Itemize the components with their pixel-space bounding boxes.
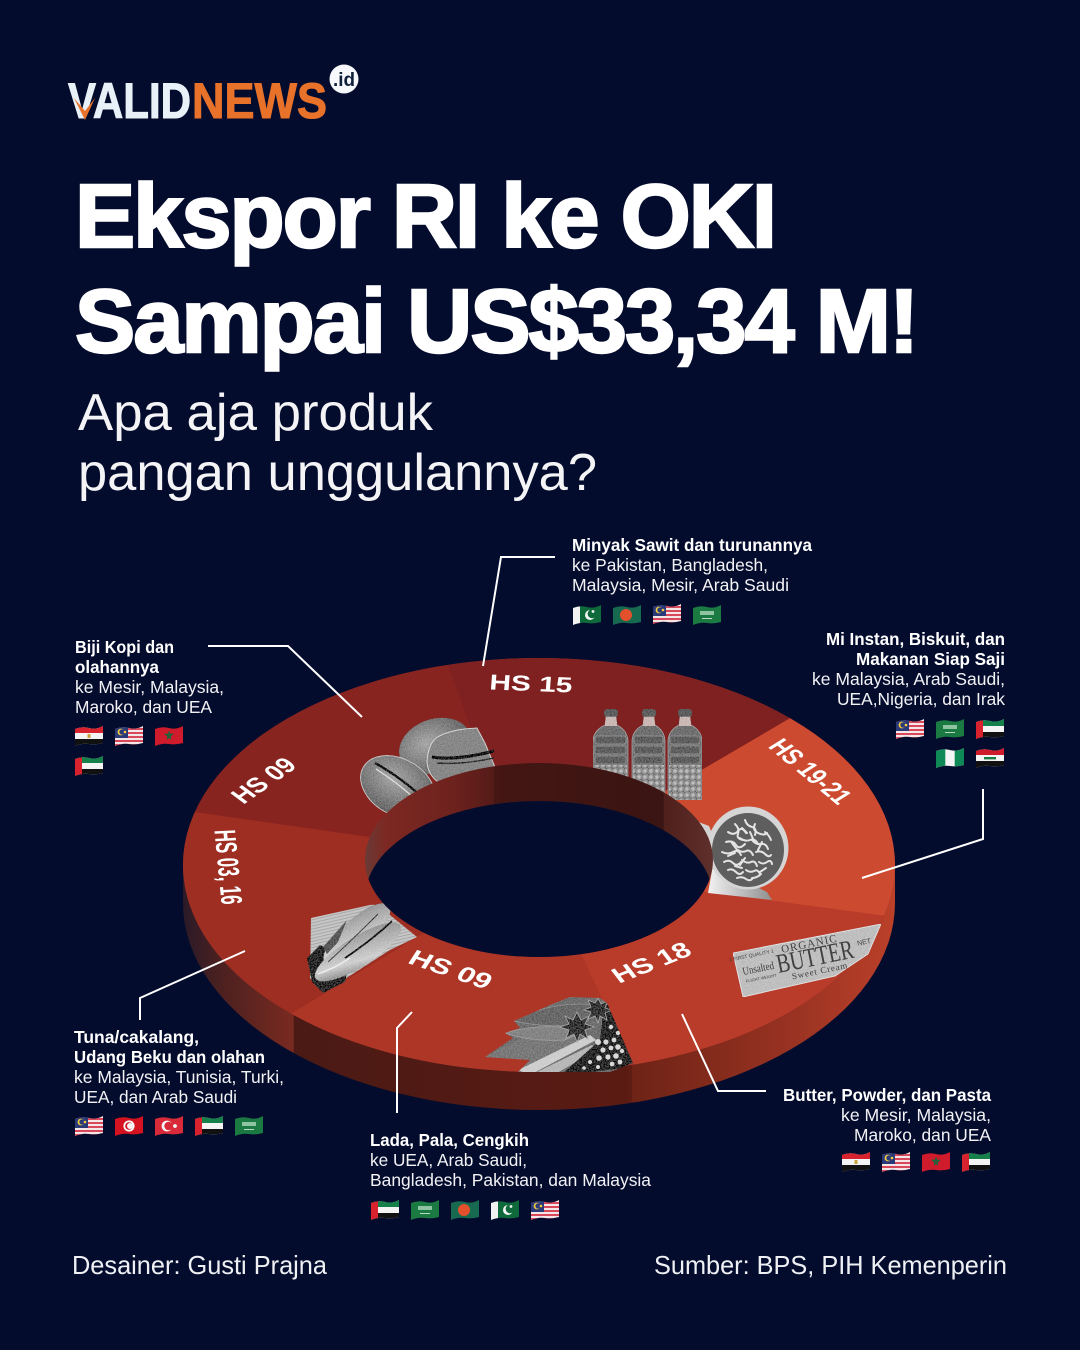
donut inner wall <box>365 763 713 957</box>
label: HS 03, 16: HS 03, 16 <box>208 829 249 905</box>
flags: Biji Kopi destinations <box>75 726 183 776</box>
callout: Minyak Sawit: ke Pakistan, Bangladesh, <box>572 555 768 575</box>
donut hole <box>368 801 710 957</box>
icon: butter stick: 1 FIRST QUALITY 1 <box>729 949 775 963</box>
callout: Lada <box>370 1130 651 1220</box>
segment: HS 15 <box>448 658 790 791</box>
callout: Tuna: UEA, dan Arab Saudi <box>74 1087 237 1107</box>
icon: butter stick: ORGANIC <box>780 933 839 956</box>
flags: Mi Instan destinations <box>896 719 1004 768</box>
logo: ValidNews.id: VALID <box>68 73 191 129</box>
callout: Lada: ke UEA, Arab Saudi, <box>370 1150 527 1170</box>
icon: butter stick: NET <box>857 938 872 948</box>
bottle 2 <box>632 709 665 800</box>
callout: Lada: Bangladesh, Pakistan, dan Malaysia <box>370 1170 651 1190</box>
icon: butter stick: FLIGHT WEIGHT <box>745 972 778 984</box>
callout: Tuna: ke Malaysia, Tunisia, Turki, <box>74 1067 284 1087</box>
flags: Tuna destinations <box>75 1116 263 1136</box>
top face base <box>180 650 900 1080</box>
leader line: Lada <box>397 1012 412 1113</box>
icon: butter stick: Sweet Cream <box>791 960 849 981</box>
bottle 1 <box>593 709 628 800</box>
footer: source: Sumber: BPS, PIH Kemenperin <box>654 1250 1007 1280</box>
logo: ValidNews.id <box>68 64 358 129</box>
callout: Lada: Lada, Pala, Cengkih <box>370 1130 529 1150</box>
label: HS 19-21: HS 19-21 <box>762 734 859 809</box>
title: Sampai US$33,34 M! <box>75 272 917 372</box>
icon: spices <box>485 997 633 1072</box>
callout: Biji Kopi: Biji Kopi dan <box>75 637 174 657</box>
callout: Mi Instan: ke Malaysia, Arab Saudi, <box>812 669 1005 689</box>
label: HS 15: HS 15 <box>489 670 573 697</box>
segment: HS 18 <box>634 917 884 1064</box>
callout: Mi Instan: Mi Instan, Biskuit, dan <box>826 629 1005 649</box>
leader line: Mi Instan <box>862 789 983 878</box>
flags: Butter destinations <box>842 1152 990 1172</box>
leaves <box>486 1036 576 1072</box>
callout: Tuna <box>74 1027 284 1136</box>
title: Ekspor RI ke OKI <box>75 167 775 267</box>
callout: Minyak Sawit: Minyak Sawit dan turunannya <box>572 535 812 555</box>
donut chart: export products <box>183 658 895 1110</box>
peppercorns <box>582 1025 624 1070</box>
leader line: Biji Kopi <box>208 646 362 717</box>
segment: HS 09 top <box>195 665 470 837</box>
callout: Biji Kopi: ke Mesir, Malaysia, <box>75 677 224 697</box>
segment: HS 09 bottom <box>291 933 633 1072</box>
callout: Biji Kopi <box>75 637 224 776</box>
donut top face segments <box>183 658 895 1072</box>
callout: Butter: Maroko, dan UEA <box>854 1125 991 1145</box>
callout: Tuna: Tuna/cakalang, <box>74 1027 199 1047</box>
donut outer side wall <box>183 865 895 1110</box>
label: HS 09 bottom: HS 09 <box>404 945 498 994</box>
logo: ValidNews.id: .id <box>333 70 355 91</box>
callout: Biji Kopi: olahannya <box>75 657 159 677</box>
subtitle: pangan unggulannya? <box>78 444 597 502</box>
icon: coffee beans <box>349 708 495 831</box>
callout: Mi Instan: UEA,Nigeria, dan Irak <box>837 689 1005 709</box>
callout: Minyak Sawit: Malaysia, Mesir, Arab Saudi <box>572 575 789 595</box>
callout: Butter: Butter, Powder, dan Pasta <box>783 1085 991 1105</box>
peppercorn base <box>564 1002 633 1072</box>
icon: fish on paper <box>307 894 417 993</box>
bottle 3 <box>668 709 702 800</box>
callout: Butter: ke Mesir, Malaysia, <box>841 1105 991 1125</box>
segment: HS 03, 16 <box>183 812 424 1014</box>
callout: Tuna: Udang Beku dan olahan <box>74 1047 265 1067</box>
star anise <box>560 998 612 1042</box>
title <box>75 167 917 372</box>
leader line: Tuna <box>140 951 245 1020</box>
icon: butter stick: Unsalted <box>741 960 776 978</box>
logo: ValidNews.id: NEWS <box>192 73 327 129</box>
flags: Minyak Sawit destinations <box>573 604 721 625</box>
cinnamon sticks <box>518 1035 596 1075</box>
callout: Minyak Sawit <box>572 535 812 625</box>
label: HS 18: HS 18 <box>606 937 697 988</box>
icon: noodle bowl <box>696 806 788 900</box>
subtitle <box>78 384 597 502</box>
segment: HS 19-21 <box>666 718 895 916</box>
icon: butter stick: BUTTER <box>774 934 856 979</box>
callout: Biji Kopi: Maroko, dan UEA <box>75 697 212 717</box>
label: HS 09 top: HS 09 <box>224 752 303 808</box>
subtitle: Apa aja produk <box>78 384 434 442</box>
leader line: Butter <box>682 1014 766 1091</box>
callout: Butter <box>783 1085 991 1172</box>
flags: Lada destinations <box>371 1200 559 1220</box>
icon: oil bottles <box>593 709 702 800</box>
callout: Mi Instan: Makanan Siap Saji <box>856 649 1005 669</box>
footer: designer credit: Desainer: Gusti Prajna <box>72 1250 328 1280</box>
callout: Mi Instan <box>812 629 1005 768</box>
icon: butter stick <box>728 924 881 997</box>
leader line: Minyak Sawit <box>483 557 555 666</box>
